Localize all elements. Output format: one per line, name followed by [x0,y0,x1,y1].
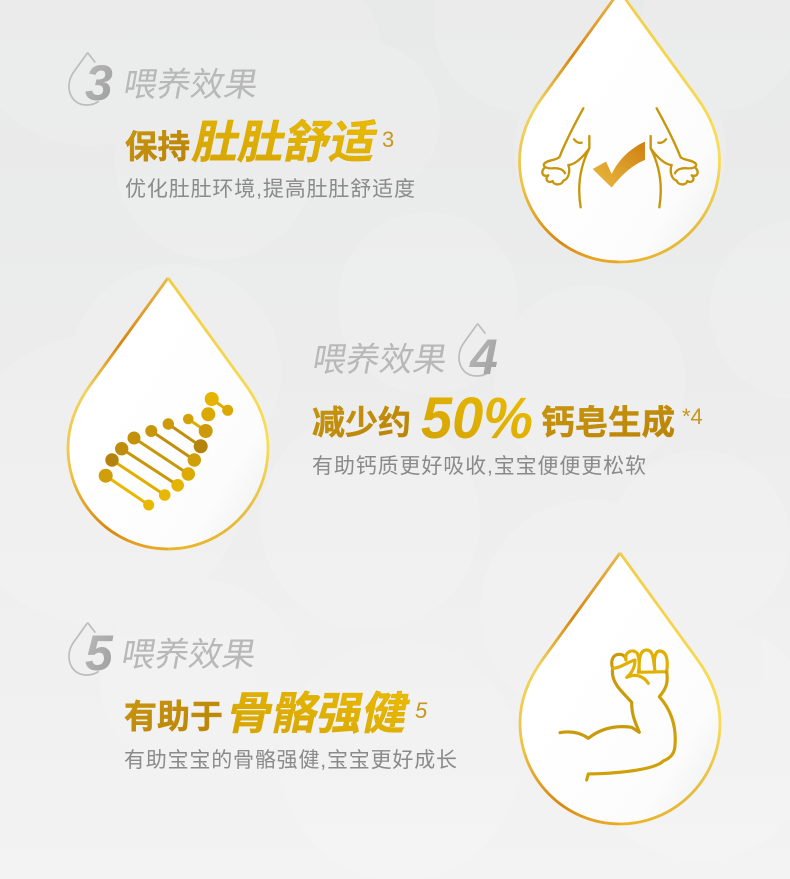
icon: small drop 5 [69,623,99,675]
icon: small drop 3 [69,53,99,105]
title emphasis 肚肚舒适: 肚肚舒适 [189,116,382,168]
title lead 有助于: 有助于 [124,698,223,735]
title tail 钙皂生成: 钙皂生成 [541,405,675,442]
section 4 heading: 喂养效果 4 [310,324,498,385]
label 喂养效果 5: 喂养效果 [119,636,259,674]
panel: drop with arm icon [520,553,720,824]
section 3 description: 优化肚肚环境,提高肚肚舒适度 [125,178,415,201]
section 5 description: 有助宝宝的骨骼强健,宝宝更好成长 [124,749,457,772]
panel: drop with DNA icon [68,278,268,549]
icon: small drop 4 [459,324,489,376]
number 3: 3 [85,55,113,111]
label 喂养效果 3: 喂养效果 [121,66,261,104]
footnote mark 3: 3 [382,127,394,152]
title emphasis 50%: 50% [421,386,533,451]
footnote mark *4: *4 [682,404,703,429]
label 喂养效果 4: 喂养效果 [310,341,450,379]
section 4 title [312,386,703,451]
section 3 title [125,116,394,168]
panel: drop with belly icon [520,0,720,262]
section 5 title [124,688,428,739]
title emphasis 骨骼强健: 骨骼强健 [223,688,414,739]
icon: baby belly with check mark [542,108,698,207]
footnote mark 5: 5 [415,698,428,723]
title lead 减少约: 减少约 [312,404,411,441]
section 3 heading: 喂养效果 3 [69,53,261,111]
number 5: 5 [85,625,114,681]
section 5 heading: 喂养效果 5 [69,623,259,681]
title lead 保持: 保持 [125,129,190,165]
number 4: 4 [469,329,498,385]
section 4 description: 有助钙质更好吸收,宝宝便便更松软 [312,455,646,478]
icon: flexed arm [560,650,675,780]
icon: DNA helix [99,392,233,510]
